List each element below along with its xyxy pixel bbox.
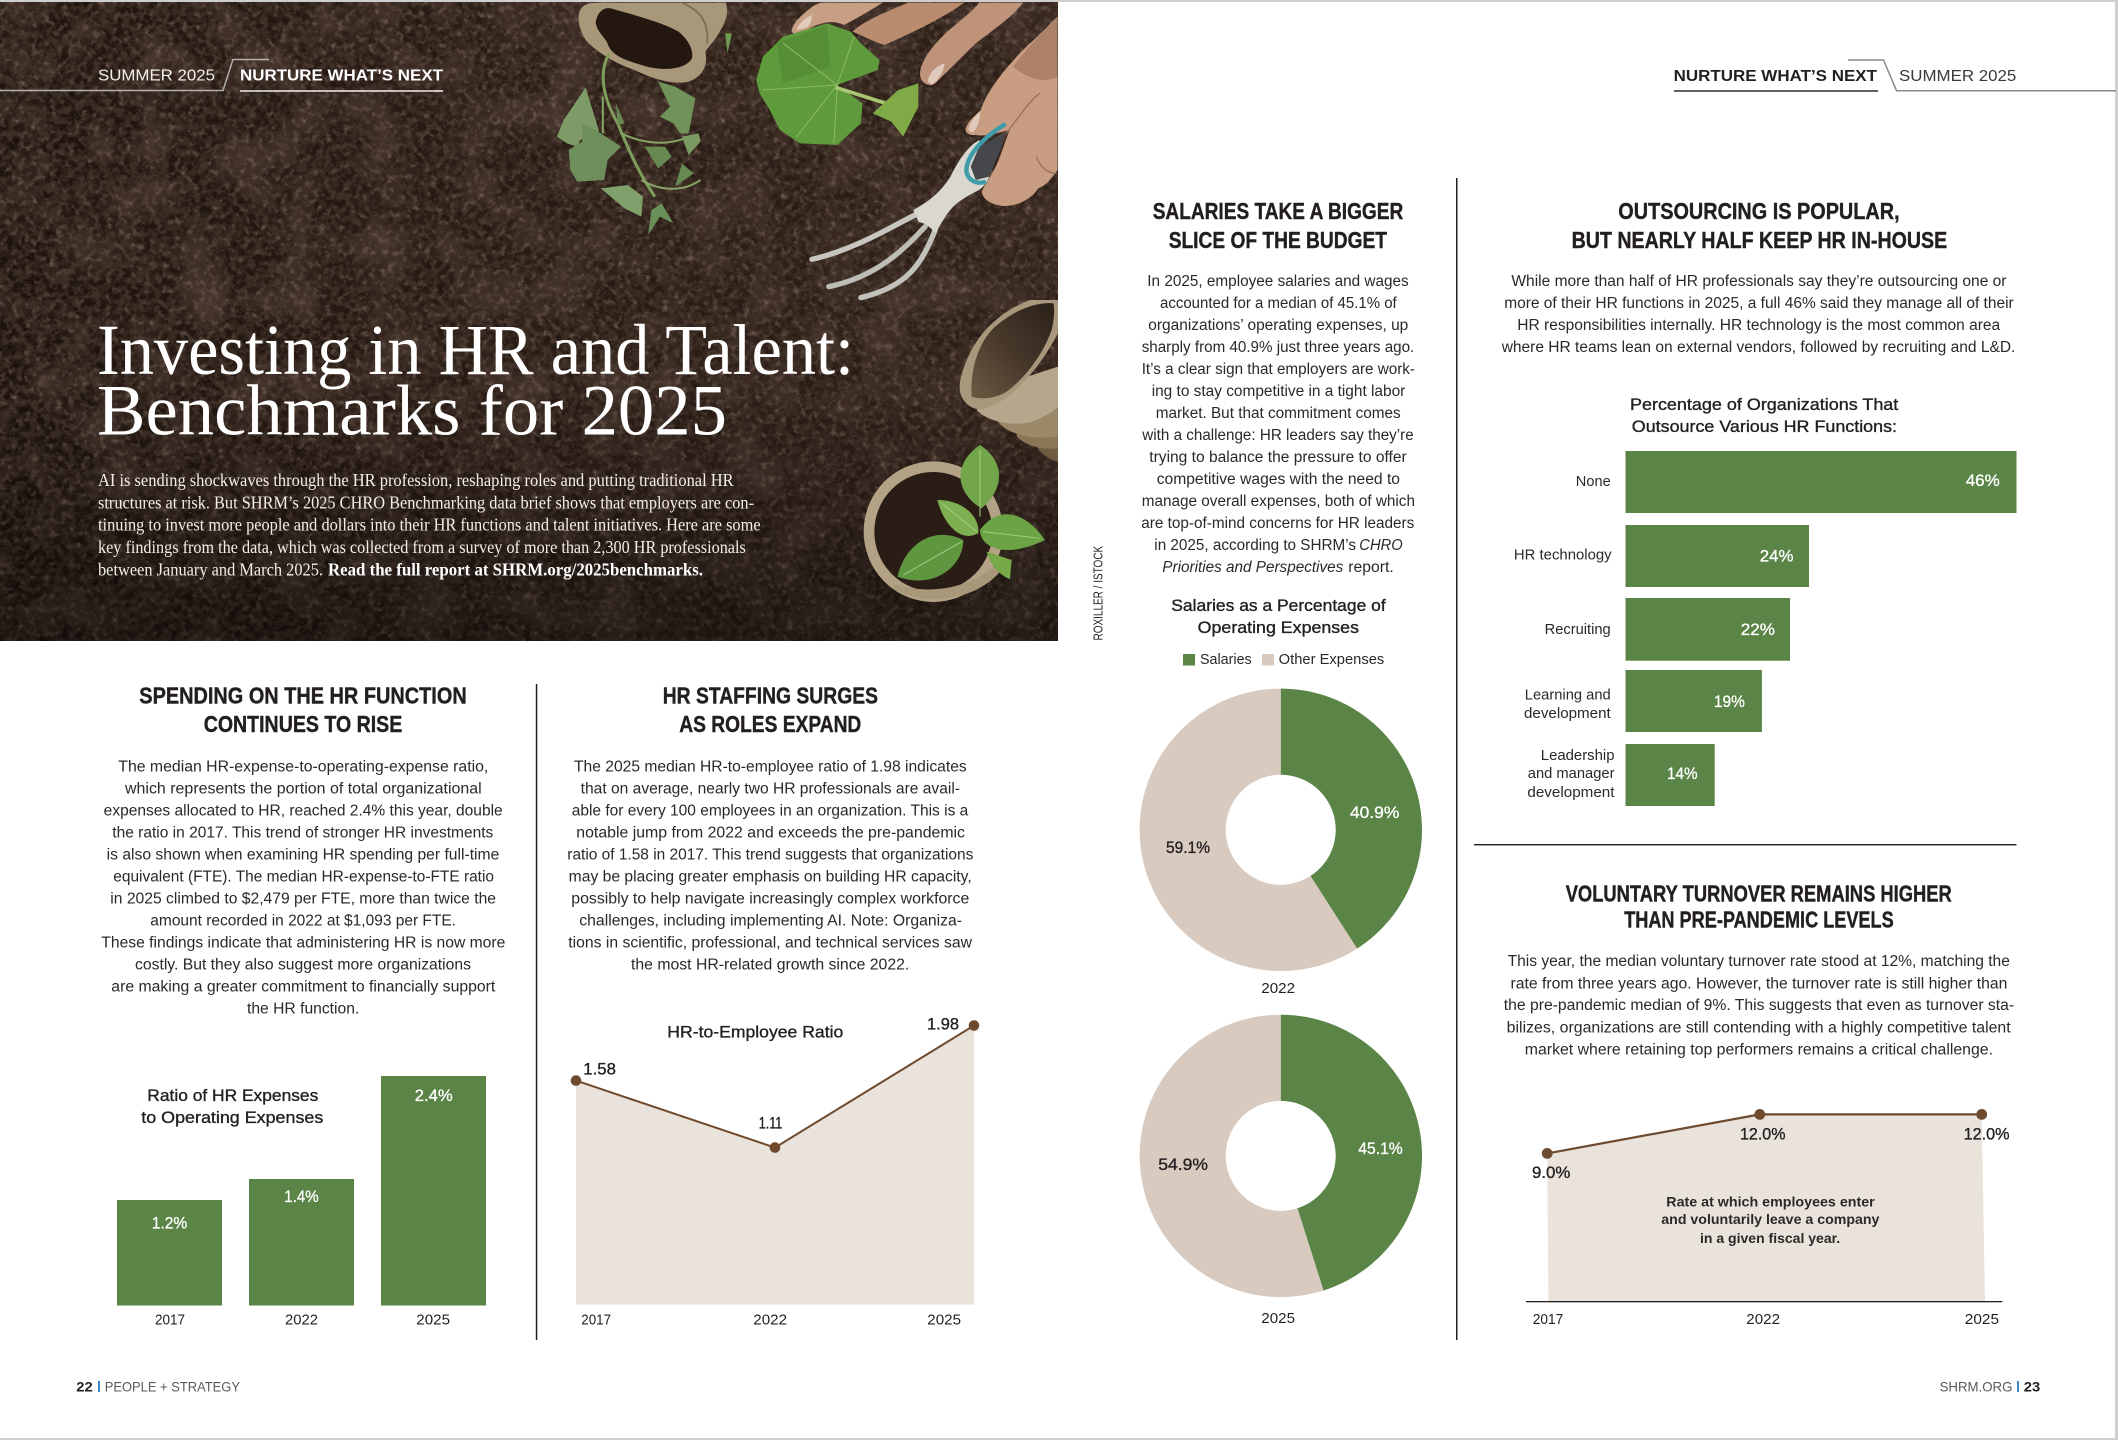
- callout: rate definition: [1661, 1193, 1880, 1246]
- photo credit: ROXILLER / ISTOCK: [1092, 545, 1106, 640]
- text block: staffing: the most HR-related growth since 2022.: [631, 957, 909, 974]
- right running header: [1674, 60, 2116, 92]
- text block: salaries: are top-of-mind concerns for HR leaders: [1141, 515, 1415, 532]
- text block: spending: equivalent (FTE). The median HR-expense-to-FTE ratio: [113, 869, 494, 886]
- left running header: SUMMER 2025: [98, 68, 215, 84]
- bar: leadership and manager development: 14%: [1667, 764, 1698, 783]
- bar: recruiting: [1545, 598, 1790, 661]
- callout: rate definition: and voluntarily leave a company: [1661, 1211, 1880, 1227]
- text block: staffing: able for every 100 employees in an organization. This is a: [572, 803, 969, 820]
- intro paragraph: AI is sending shockwaves through the HR profession, reshaping roles and putting traditional HR: [98, 470, 734, 490]
- text block: outsourcing: [1501, 273, 2015, 356]
- heading: staffing: HR STAFFING SURGES: [663, 683, 878, 709]
- heading: turnover: [1566, 881, 1952, 932]
- right running header: NURTURE WHAT’S NEXT: [1674, 68, 1878, 85]
- text block: spending: The median HR-expense-to-operating-expense ratio,: [118, 759, 488, 776]
- chart title: outsourcing: Percentage of Organizations That: [1630, 396, 1899, 414]
- donut chart 2022: 59.1%: [1166, 838, 1210, 857]
- text block: spending: [101, 759, 505, 1018]
- main title: Investing in HR and Talent:: [97, 310, 854, 390]
- bar: learning and development: Learning and: [1525, 688, 1611, 704]
- text block: staffing: possibly to help navigate increasingly complex workforce: [571, 891, 969, 908]
- heading: salaries: SLICE OF THE BUDGET: [1169, 227, 1387, 253]
- left footer: 22: [76, 1378, 93, 1394]
- bar: learning and development: 19%: [1714, 692, 1745, 711]
- text block: salaries: manage overall expenses, both of which: [1142, 493, 1415, 510]
- bar 2022: [249, 1179, 354, 1328]
- text block: salaries: competitive wages with the need to: [1157, 471, 1400, 488]
- donut chart 2022: [1140, 689, 1422, 997]
- text block: salaries: It’s a clear sign that employers are work-: [1142, 361, 1415, 378]
- text block: staffing: tions in scientific, professional, and technical services saw: [568, 935, 973, 952]
- heading: turnover: THAN PRE-PANDEMIC LEVELS: [1624, 906, 1894, 932]
- bar 2022: 2022: [285, 1312, 318, 1328]
- text block: outsourcing: where HR teams lean on external vendors, followed by recruiting and L&D.: [1501, 339, 2015, 356]
- area chart: turnover rate: 2025: [1965, 1312, 1999, 1328]
- text block: outsourcing: While more than half of HR professionals say they’re outsourcing one or: [1511, 273, 2006, 290]
- intro paragraph: structures at risk. But SHRM’s 2025 CHRO Benchmarking data brief shows that employers are con-: [98, 492, 754, 512]
- text block: spending: are making a greater commitment to financially support: [111, 979, 496, 996]
- text block: salaries: Priorities and Perspectives: [1162, 559, 1344, 576]
- left running header: NURTURE WHAT’S NEXT: [240, 68, 444, 84]
- chart title: ratio: [141, 1087, 323, 1127]
- bar: HR technology: [1514, 525, 1809, 587]
- chart title: salaries: Operating Expenses: [1198, 619, 1359, 637]
- heading: turnover: VOLUNTARY TURNOVER REMAINS HIGHER: [1566, 881, 1952, 907]
- bar: leadership and manager development: and manager: [1528, 766, 1615, 782]
- bar: HR technology: HR technology: [1514, 547, 1612, 563]
- callout: rate definition: in a given fiscal year.: [1700, 1230, 1840, 1246]
- text block: spending: amount recorded in 2022 at $1,093 per FTE.: [150, 913, 456, 930]
- heading: salaries: [1153, 198, 1404, 253]
- bar: leadership and manager development: [1527, 744, 1715, 806]
- bar 2017: 1.2%: [152, 1213, 187, 1232]
- intro paragraph: tinuing to invest more people and dollars into their HR functions and talent initiatives. Here are some: [98, 515, 761, 535]
- panel: salaries: [1140, 198, 1422, 1327]
- text block: turnover: market where retaining top performers remains a critical challenge.: [1525, 1042, 1993, 1058]
- text block: salaries: organizations’ operating expenses, up: [1148, 317, 1408, 334]
- bar: recruiting: Recruiting: [1545, 622, 1611, 638]
- left running header: [0, 60, 444, 92]
- heading: salaries: SALARIES TAKE A BIGGER: [1153, 198, 1404, 224]
- intro paragraph: key findings from the data, which was collected from a survey of more than 2,300 HR professionals: [98, 537, 746, 557]
- area chart: HR-to-employee ratio: 2025: [927, 1312, 961, 1328]
- area chart: turnover rate: [1526, 1109, 2010, 1328]
- area chart: turnover rate: 12.0%: [1964, 1124, 2010, 1143]
- bar 2025: 2.4%: [415, 1086, 453, 1105]
- left footer: PEOPLE + STRATEGY: [105, 1378, 241, 1394]
- area chart: HR-to-employee ratio: 2017: [581, 1312, 611, 1328]
- callout: rate definition: Rate at which employees enter: [1666, 1193, 1875, 1209]
- text block: spending: costly. But they also suggest more organizations: [135, 957, 471, 974]
- text block: salaries: with a challenge: HR leaders say they’re: [1141, 427, 1414, 444]
- text block: staffing: ratio of 1.58 in 2017. This trend suggests that organizations: [567, 847, 974, 864]
- donut chart 2022: 2022: [1261, 981, 1295, 997]
- panel: HR staffing: [567, 683, 979, 1328]
- chart title: outsourcing: Outsource Various HR Functions:: [1632, 418, 1897, 436]
- heading: spending: [139, 683, 467, 737]
- right footer: 23: [2024, 1378, 2040, 1394]
- area chart: HR-to-employee ratio: [571, 1015, 979, 1328]
- donut chart 2025: 45.1%: [1358, 1139, 1403, 1158]
- heading: staffing: AS ROLES EXPAND: [679, 711, 861, 737]
- donut chart 2022: 40.9%: [1350, 803, 1399, 822]
- chart title: ratio: to Operating Expenses: [141, 1109, 323, 1127]
- main title: Benchmarks for 2025: [97, 370, 727, 450]
- heading: outsourcing: BUT NEARLY HALF KEEP HR IN-HOUSE: [1572, 227, 1947, 253]
- text block: salaries: ing to stay competitive in a tight labor: [1152, 383, 1405, 400]
- text block: salaries: report.: [1348, 559, 1394, 576]
- text block: spending: expenses allocated to HR, reached 2.4% this year, double: [104, 803, 503, 820]
- text block: turnover: bilizes, organizations are still contending with a highly competitive talent: [1507, 1019, 2011, 1036]
- right running header: SUMMER 2025: [1899, 68, 2016, 85]
- area chart: turnover rate: 9.0%: [1532, 1163, 1570, 1182]
- area chart: HR-to-employee ratio: 1.98: [927, 1015, 959, 1034]
- text block: salaries: accounted for a median of 45.1% of: [1160, 295, 1397, 312]
- bar 2017: [117, 1200, 222, 1328]
- text block: turnover: rate from three years ago. However, the turnover rate is still higher than: [1510, 975, 2007, 992]
- heading: spending: CONTINUES TO RISE: [204, 711, 402, 737]
- text block: spending: is also shown when examining HR spending per full-time: [107, 847, 499, 864]
- text block: turnover: This year, the median voluntary turnover rate stood at 12%, matching the: [1508, 953, 2010, 970]
- heading: outsourcing: [1572, 198, 1947, 253]
- text block: spending: the HR function.: [247, 1001, 359, 1018]
- bar: leadership and manager development: development: [1527, 785, 1614, 801]
- bar 2022: 1.4%: [284, 1187, 319, 1206]
- heading: spending: SPENDING ON THE HR FUNCTION: [139, 683, 467, 709]
- donut chart 2025: [1140, 1015, 1422, 1327]
- bar: learning and development: development: [1524, 706, 1611, 722]
- area chart: turnover rate: 2022: [1746, 1312, 1780, 1328]
- hero photo: soil, pots, seedlings, hands and garden fork: [0, 2, 1058, 641]
- chart title: salaries: [1171, 597, 1386, 637]
- area chart: HR-to-employee ratio: HR-to-Employee Ratio: [667, 1023, 843, 1041]
- area chart: turnover rate: 12.0%: [1740, 1124, 1786, 1143]
- intro paragraph: Read the full report at SHRM.org/2025benchmarks.: [328, 560, 703, 580]
- bar 2017: 2017: [155, 1312, 185, 1328]
- bar: none: None: [1576, 474, 1611, 490]
- panel: outsourcing: [1501, 198, 2016, 806]
- text block: turnover: the pre-pandemic median of 9%. This suggests that even as turnover sta-: [1504, 997, 2014, 1014]
- bar 2025: 2025: [416, 1312, 450, 1328]
- donut chart 2025: 2025: [1261, 1311, 1295, 1327]
- text block: salaries: market. But that commitment comes: [1156, 405, 1401, 422]
- intro paragraph: [98, 470, 761, 580]
- text block: spending: which represents the portion of total organizational: [124, 781, 482, 798]
- heading: staffing: [663, 683, 878, 737]
- text block: salaries: [1141, 273, 1415, 576]
- right footer: SHRM.ORG: [1940, 1378, 2012, 1394]
- text block: spending: in 2025 climbed to $2,479 per FTE, more than twice the: [110, 891, 496, 908]
- area chart: turnover rate: 2017: [1533, 1312, 1563, 1328]
- legend: Salaries: [1200, 652, 1252, 668]
- text block: salaries: in 2025, according to SHRM’s: [1154, 537, 1356, 554]
- legend: Other Expenses: [1279, 652, 1384, 668]
- intro paragraph: between January and March 2025.: [98, 560, 323, 580]
- text block: staffing: [567, 759, 974, 974]
- text block: outsourcing: HR responsibilities internally. HR technology is the most common area: [1517, 317, 2001, 334]
- text block: turnover: [1504, 953, 2014, 1058]
- area chart: HR-to-employee ratio: 2022: [753, 1312, 787, 1328]
- text block: salaries: sharply from 40.9% just three years ago.: [1142, 339, 1414, 356]
- panel: voluntary turnover: [1504, 881, 2014, 1328]
- legend: [1183, 652, 1384, 668]
- main title: [97, 310, 854, 450]
- heading: outsourcing: OUTSOURCING IS POPULAR,: [1618, 198, 1900, 224]
- donut chart 2025: 54.9%: [1158, 1155, 1208, 1174]
- bar: recruiting: 22%: [1741, 620, 1775, 639]
- bar 2025: [381, 1076, 486, 1328]
- chart title: ratio: Ratio of HR Expenses: [147, 1087, 318, 1105]
- text block: staffing: notable jump from 2022 and exceeds the pre-pandemic: [576, 825, 965, 842]
- text block: salaries: In 2025, employee salaries and wages: [1147, 273, 1409, 290]
- bar: leadership and manager development: Leadership: [1541, 748, 1614, 764]
- panel: spending on the HR function: [101, 683, 505, 1328]
- text block: salaries: trying to balance the pressure to offer: [1149, 449, 1407, 466]
- text block: staffing: The 2025 median HR-to-employee ratio of 1.98 indicates: [574, 759, 967, 776]
- text block: salaries: CHRO: [1359, 537, 1403, 554]
- horizontal bar chart: outsourced functions: [1514, 451, 2016, 806]
- text block: spending: the ratio in 2017. This trend of stronger HR investments: [112, 825, 494, 842]
- text block: staffing: challenges, including implementing AI. Note: Organiza-: [579, 913, 962, 930]
- text block: outsourcing: more of their HR functions in 2025, a full 46% said they manage all of their: [1504, 295, 2014, 312]
- chart title: salaries: Salaries as a Percentage of: [1171, 597, 1386, 615]
- area chart: HR-to-employee ratio: 1.58: [583, 1060, 616, 1079]
- text block: staffing: that on average, nearly two HR professionals are avail-: [581, 781, 960, 798]
- text block: staffing: may be placing greater emphasis on building HR capacity,: [569, 869, 972, 886]
- bar: none: [1576, 451, 2016, 513]
- area chart: HR-to-employee ratio: 1.11: [759, 1113, 782, 1132]
- bar: learning and development: [1524, 670, 1762, 732]
- bar chart: ratio of HR expenses: [117, 1076, 486, 1328]
- bar: none: 46%: [1966, 471, 2000, 490]
- chart title: outsourcing: [1630, 396, 1899, 436]
- bar: HR technology: 24%: [1760, 546, 1794, 565]
- text block: spending: These findings indicate that administering HR is now more: [101, 935, 505, 952]
